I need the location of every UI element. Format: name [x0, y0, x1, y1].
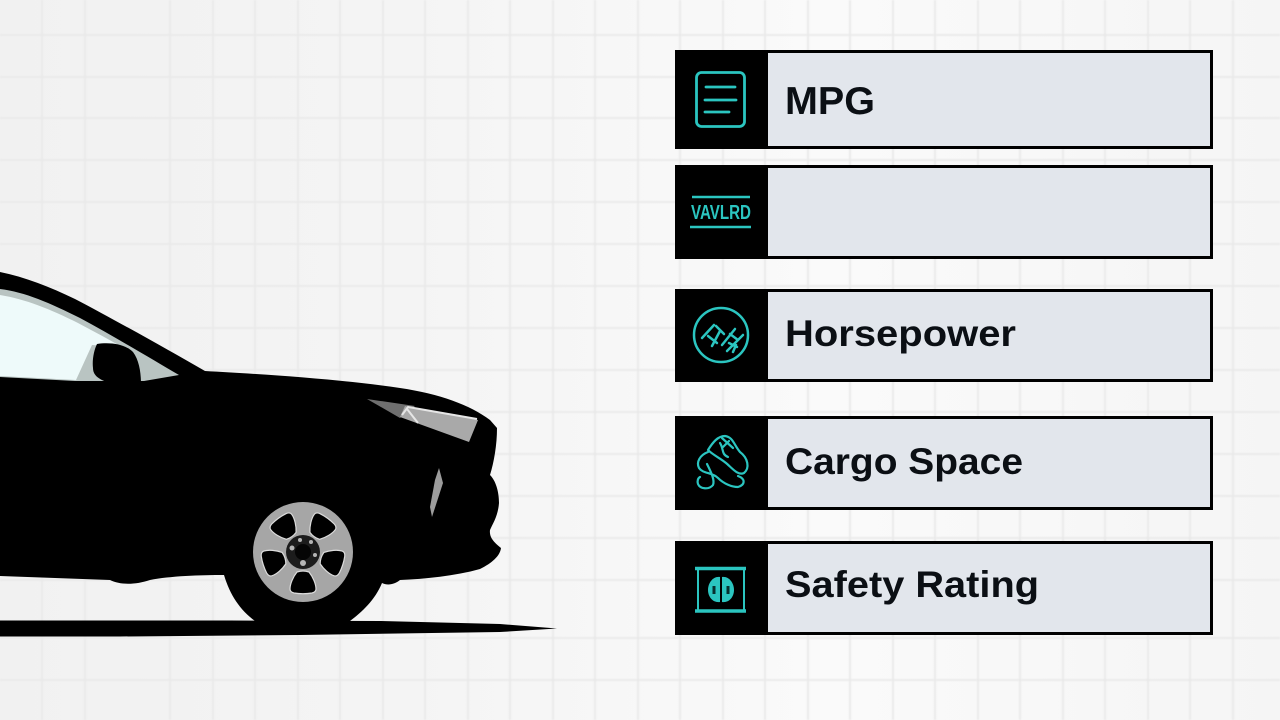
label: Cargo Space: Cargo Space [785, 441, 1023, 482]
row: blank label [675, 165, 1212, 259]
ground shadow [0, 620, 557, 636]
car silhouette [0, 272, 501, 621]
row: Horsepower [675, 289, 1212, 382]
window glass [0, 295, 122, 380]
label: MPG: MPG [785, 80, 875, 123]
side marker [430, 468, 443, 517]
icon: garbled badge [690, 197, 751, 227]
row: Cargo Space [675, 416, 1212, 510]
icon: horsepower circle [694, 308, 748, 362]
wheel [253, 502, 353, 602]
icon: safety frame [695, 568, 746, 611]
label: Safety Rating: Safety Rating [785, 564, 1039, 605]
car body [0, 272, 501, 621]
row: Safety Rating [675, 541, 1212, 635]
row: MPG [675, 50, 1212, 149]
side mirror [93, 343, 141, 384]
headlight [367, 399, 478, 442]
icon: cargo straps [698, 436, 747, 488]
icon: document [696, 72, 744, 126]
label: Horsepower: Horsepower [785, 313, 1016, 354]
icon: garbled badge: VAVLRD [691, 202, 751, 224]
window frame [0, 289, 179, 381]
